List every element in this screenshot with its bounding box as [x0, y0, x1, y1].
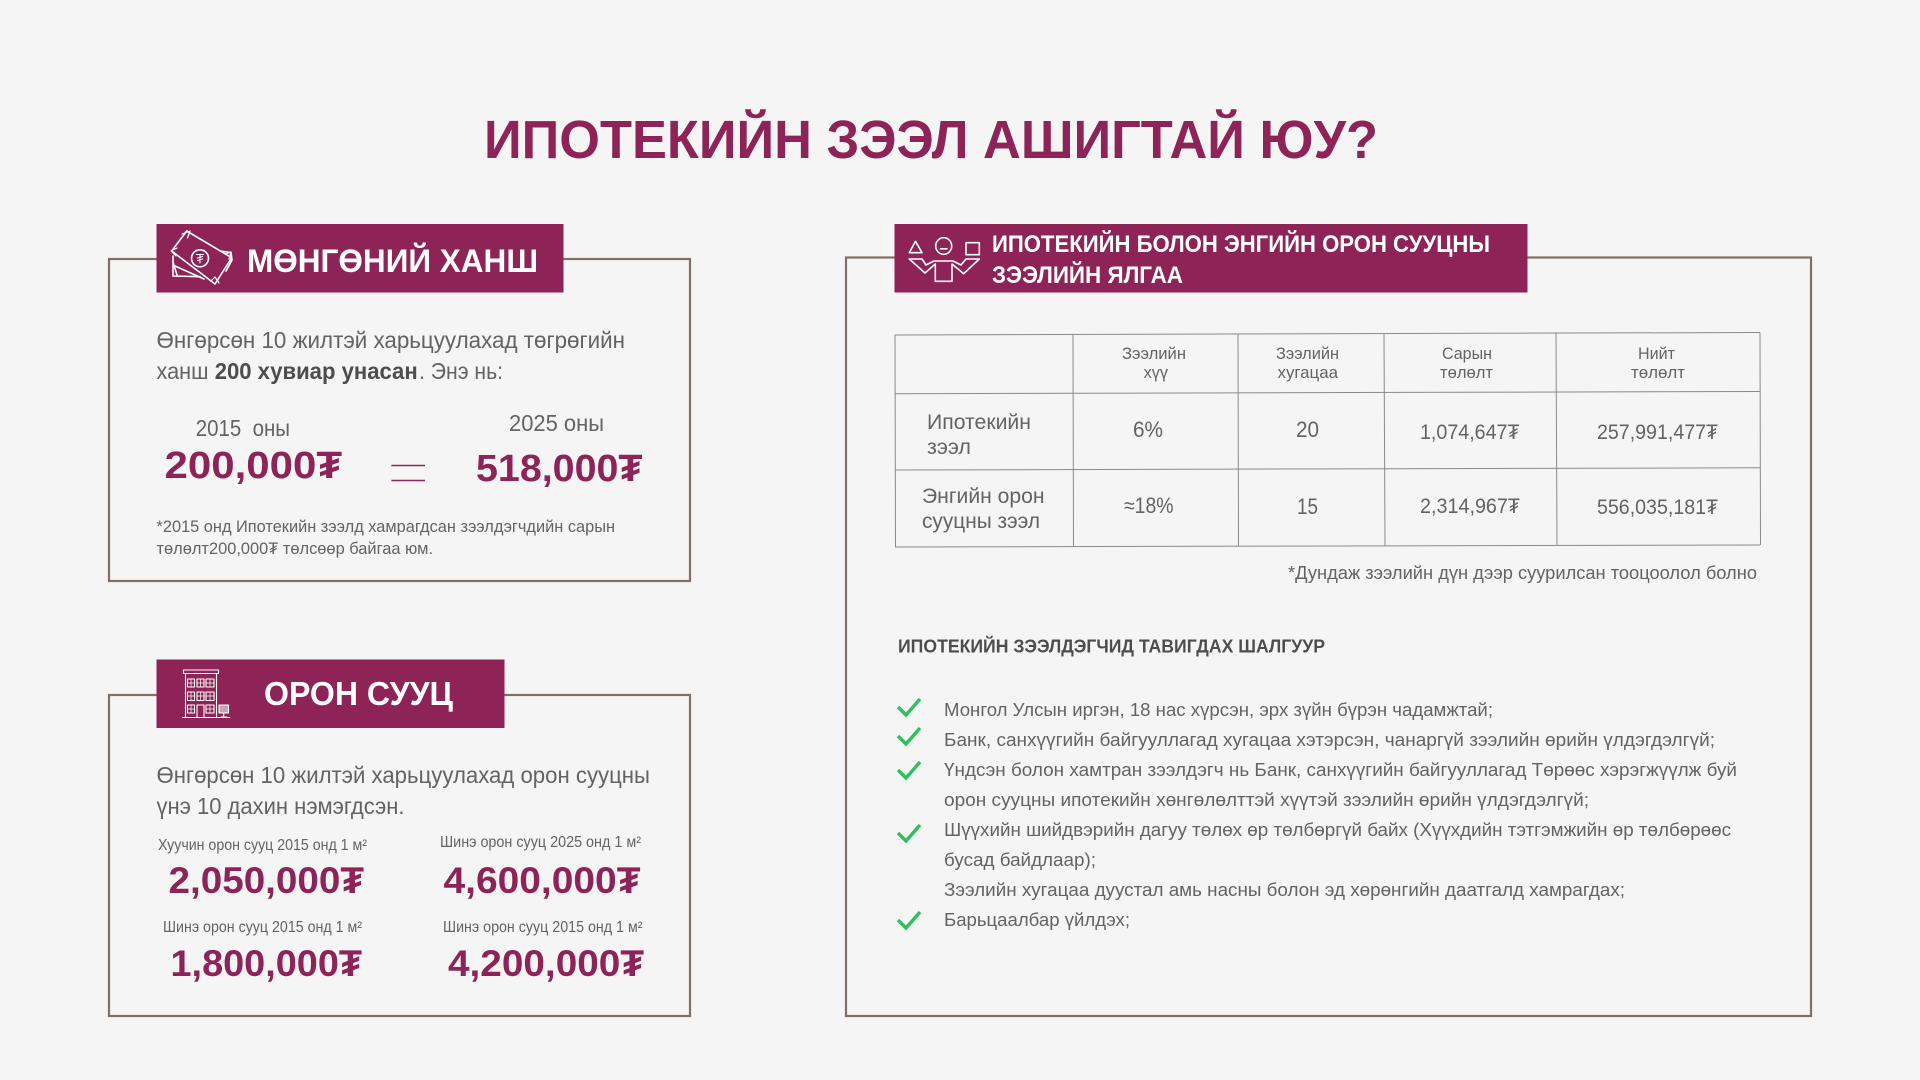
text: housing description: Өнгөрсөн 10 жилтэй харьцуулахад орон сууцны — [156, 762, 650, 788]
icon: person weighing options — [909, 238, 979, 281]
icon: banknotes — [171, 231, 232, 284]
footnote: exchange rate: *2015 онд Ипотекийн зээлд хамрагдсан зээлдэгчдийн сарын — [156, 517, 615, 536]
text: exchange rate description: 200 хувиар унасан — [215, 358, 418, 384]
table row: mortgage: 6% — [1133, 417, 1163, 442]
table row: ordinary housing loan — [922, 484, 1718, 533]
stat: old housing 2015 — [158, 837, 367, 901]
stat: new housing 2015 second — [443, 919, 644, 984]
stat: 2025 rate: 2025 оны — [509, 410, 604, 436]
criteria text: Банк, санхүүгийн байгууллагад хугацаа хэтэрсэн, чанаргүй зээлийн өрийн үлдэгдэлгүй; — [944, 729, 1715, 750]
header: exchange rate — [156, 224, 564, 292]
table footnote: *Дундаж зээлийн дүн дээр суурилсан тооцоолол болно — [1288, 562, 1757, 583]
table header row — [1122, 345, 1685, 382]
table header row: Зээлийн — [1276, 345, 1339, 363]
heading: housing: ОРОН СУУЦ — [264, 675, 453, 712]
heading: loan comparison: ИПОТЕКИЙН БОЛОН ЭНГИЙН ОРОН СУУЦНЫ — [992, 230, 1490, 258]
text: exchange rate description: . Энэ нь: — [419, 358, 503, 384]
criteria text: орон сууцны ипотекийн хөнгөлөлттэй хүүтэй зээлийн өрийн үлдэгдэлгүй; — [944, 789, 1589, 810]
panel: loan comparison — [846, 224, 1811, 1016]
table header row: төлөлт — [1440, 364, 1493, 382]
table row: mortgage: 257,991,477₮ — [1597, 421, 1718, 444]
stat: new housing 2015 second: Шинэ орон сууц 2015 онд 1 м² — [443, 919, 642, 936]
criteria text: Барьцаалбар үйлдэх; — [944, 909, 1130, 930]
stat: old housing 2015: Хуучин орон сууц 2015 онд 1 м² — [158, 837, 367, 854]
stat: new housing 2015: 1,800,000₮ — [170, 943, 362, 984]
table row: ordinary housing loan: 15 — [1297, 494, 1318, 519]
table header row: Нийт — [1638, 345, 1675, 363]
panel: exchange rate — [109, 224, 690, 581]
criteria text: Шүүхийн шийдвэрийн дагуу төлөх өр төлбөргүй байх (Хүүхдийн тэтгэмжийн өр төлбөрөөс — [944, 819, 1731, 840]
table header row: хугацаа — [1278, 364, 1339, 382]
heading: exchange rate: МӨНГӨНИЙ ХАНШ — [247, 243, 538, 279]
table row: mortgage: Ипотекийн — [927, 410, 1031, 434]
stat: 2025 rate: 518,000₮ — [476, 448, 642, 490]
criteria list — [898, 699, 1737, 930]
table row: mortgage — [927, 410, 1718, 459]
stat: 2015 rate: 200,000₮ — [164, 445, 342, 487]
table row: ordinary housing loan: 2,314,967₮ — [1420, 495, 1520, 518]
table row: ordinary housing loan: сууцны зээл — [922, 509, 1040, 533]
heading: loan comparison — [992, 230, 1490, 289]
stat: 2015 rate — [164, 415, 342, 487]
footnote: exchange rate — [156, 517, 615, 558]
equals sign — [391, 466, 425, 480]
table row: ordinary housing loan: 556,035,181₮ — [1597, 496, 1718, 519]
table row: mortgage: 1,074,647₮ — [1420, 421, 1520, 444]
table row: mortgage: зээл — [927, 435, 971, 459]
header: loan comparison — [894, 224, 1528, 292]
criteria text: Үндсэн болон хамтран зээлдэгч нь Банк, санхүүгийн байгууллагад Төрөөс хэрэгжүүлж буй — [944, 759, 1737, 780]
criteria text: Зээлийн хугацаа дуустал амь насны болон эд хөрөнгийн даатгалд хамрагдах; — [944, 879, 1625, 900]
table header row: Сарын — [1442, 345, 1492, 363]
criteria text: бусад байдлаар); — [944, 849, 1096, 870]
subheading: borrower criteria: ИПОТЕКИЙН ЗЭЭЛДЭГЧИД ТАВИГДАХ ШАЛГУУР — [898, 636, 1325, 657]
criteria text: Монгол Улсын иргэн, 18 нас хүрсэн, эрх зүйн бүрэн чадамжтай; — [944, 699, 1493, 720]
stat: new housing 2025: Шинэ орон сууц 2025 онд 1 м² — [440, 834, 641, 851]
table header row: Зээлийн — [1122, 345, 1186, 363]
table row: ordinary housing loan: Энгийн орон — [922, 484, 1044, 508]
comparison table — [895, 332, 1760, 547]
stat: new housing 2025 — [440, 834, 641, 901]
stat: 2015 rate: 2015 оны — [196, 415, 290, 441]
stat: new housing 2015: Шинэ орон сууц 2015 онд 1 м² — [163, 919, 362, 936]
criteria text — [944, 699, 1737, 930]
table row: ordinary housing loan: ≈18% — [1124, 493, 1174, 518]
footnote: exchange rate: төлөлт200,000₮ төлсөөр байгаа юм. — [156, 539, 433, 558]
stat: new housing 2025: 4,600,000₮ — [444, 860, 641, 901]
text: housing description — [156, 762, 650, 819]
text: exchange rate description — [156, 327, 625, 384]
text: exchange rate description: ханш — [156, 358, 208, 384]
text: exchange rate description: Өнгөрсөн 10 жилтэй харьцуулахад төгрөгийн — [156, 327, 625, 353]
stat: new housing 2015 — [163, 919, 362, 984]
stat: new housing 2015 second: 4,200,000₮ — [448, 943, 644, 984]
check icons — [898, 699, 920, 928]
table grid — [895, 332, 1760, 547]
stat: old housing 2015: 2,050,000₮ — [168, 860, 364, 901]
table header row: хүү — [1144, 364, 1169, 382]
stat: 2025 rate — [476, 410, 642, 490]
heading: loan comparison: ЗЭЭЛИЙН ЯЛГАА — [992, 261, 1183, 289]
header: housing — [156, 660, 504, 728]
table header row: төлөлт — [1631, 364, 1685, 382]
table row: mortgage: 20 — [1296, 417, 1319, 442]
text: housing description: үнэ 10 дахин нэмэгдсэн. — [156, 793, 404, 819]
icon: apartment building — [182, 670, 230, 718]
title: ИПОТЕКИЙН ЗЭЭЛ АШИГТАЙ ЮУ? — [484, 109, 1378, 170]
panel: housing — [109, 660, 690, 1016]
